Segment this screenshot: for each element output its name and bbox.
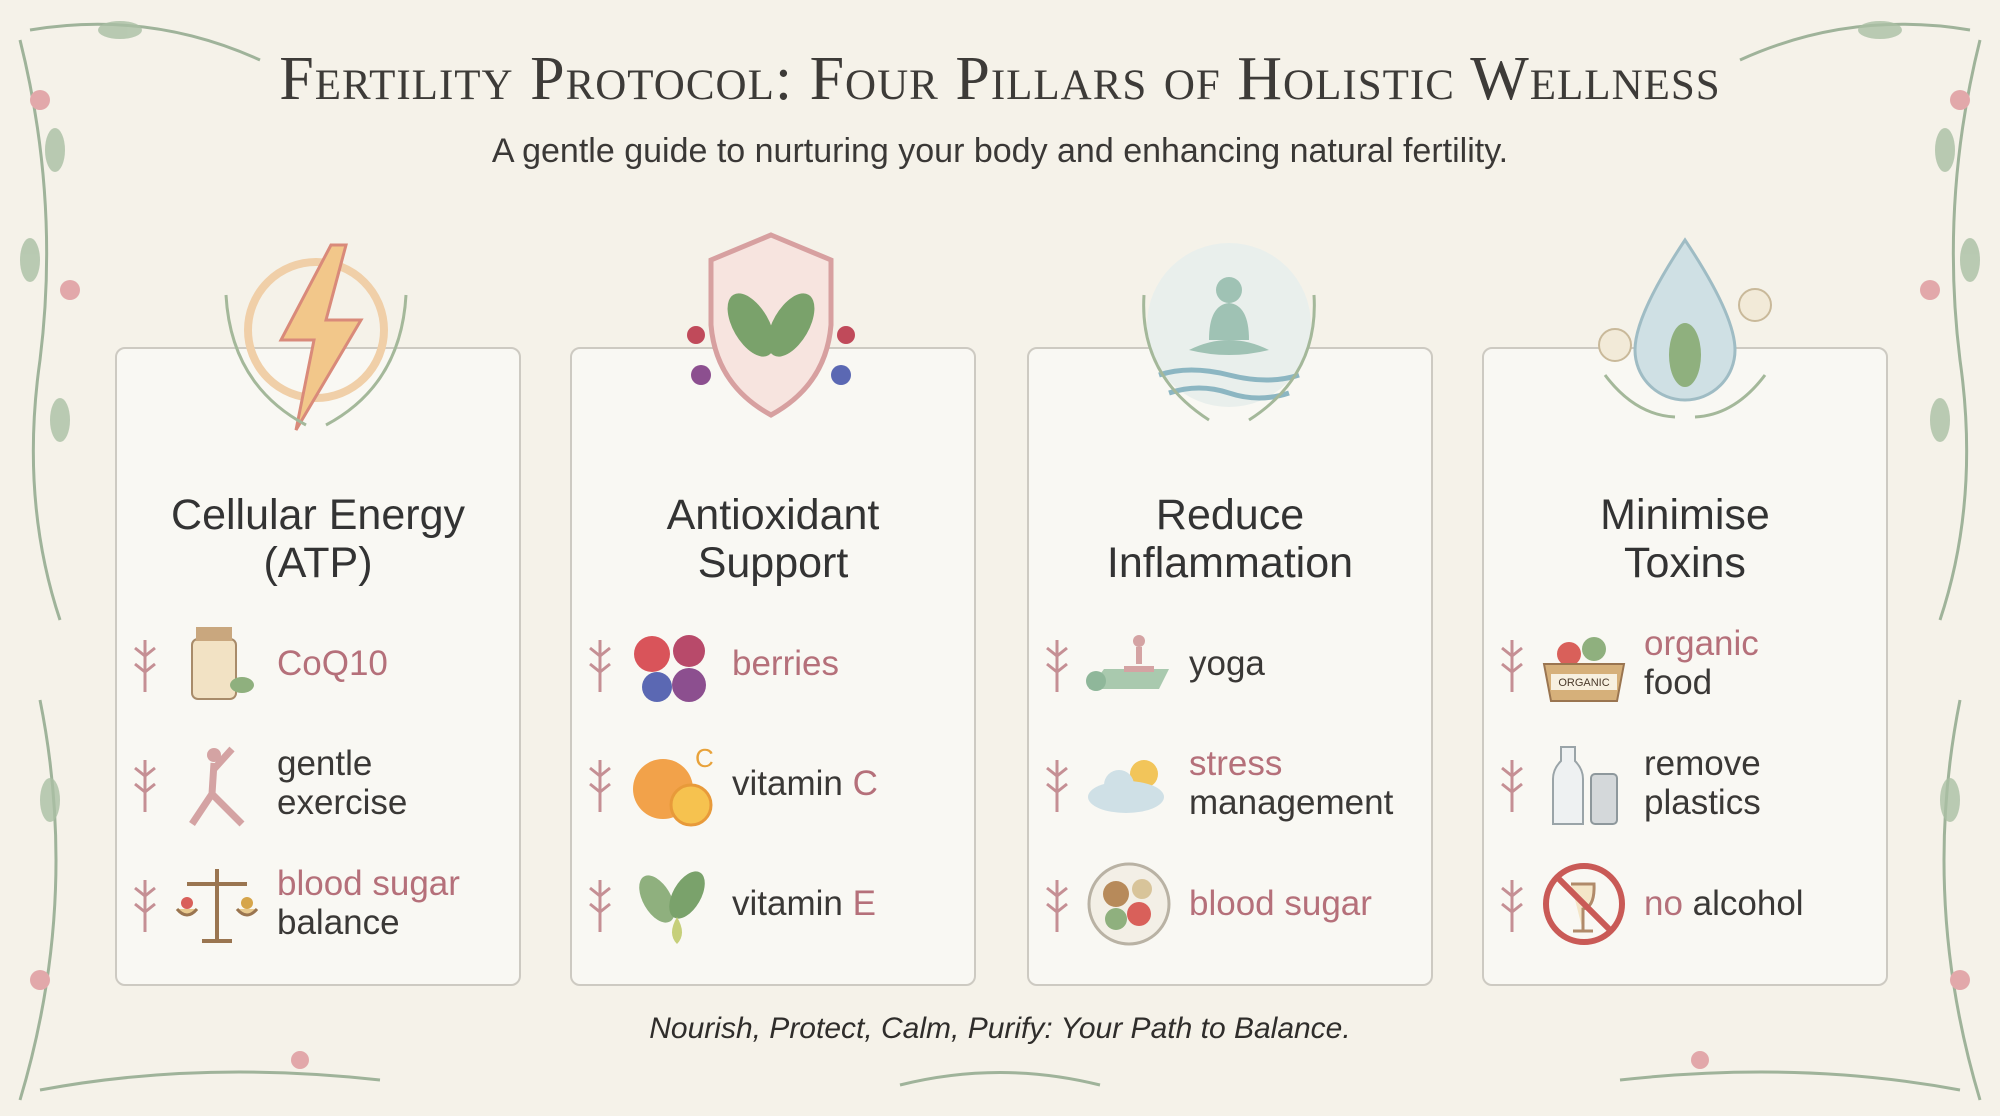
- item: organic food: ORGANIC: [1558, 677, 1610, 689]
- item: blood sugar balance: balance: [277, 903, 400, 942]
- title: Fertility Protocol: Four Pillars of Holistic Wellness: [279, 45, 1721, 113]
- footer tagline: Nourish, Protect, Calm, Purify: Your Path to Balance.: [649, 1012, 1351, 1045]
- panel: reduce inflammation: [1027, 347, 1433, 986]
- item: vitamin E: vitamin E: [732, 884, 876, 923]
- item: remove plastics: [1501, 744, 1761, 825]
- heading: Toxins: [1624, 539, 1746, 587]
- item: no alcohol: [1501, 863, 1804, 945]
- subtitle: A gentle guide to nurturing your body and enhancing natural fertility.: [492, 132, 1508, 170]
- item: blood sugar balance: [134, 864, 460, 943]
- item: yoga: [1046, 635, 1265, 692]
- heading: [666, 491, 879, 587]
- panel: cellular energy: [115, 347, 521, 986]
- item: yoga: yoga: [1189, 644, 1265, 683]
- item: stress management: [1046, 744, 1394, 822]
- item: gentle exercise: [134, 744, 407, 826]
- panel: antioxidant support: [570, 347, 976, 986]
- item: gentle exercise: exercise: [277, 783, 407, 822]
- panel: minimise toxins: [1482, 347, 1888, 986]
- heading: Minimise: [1600, 491, 1770, 539]
- item: organic food: [1501, 624, 1759, 702]
- item: organic food: food: [1644, 663, 1712, 702]
- heading: [1600, 491, 1770, 587]
- item: berries: berries: [732, 644, 839, 683]
- heading: Cellular Energy: [171, 491, 465, 539]
- icon: lightning: [224, 244, 408, 431]
- heading: Reduce: [1156, 491, 1304, 539]
- item: stress management: stress: [1189, 744, 1282, 783]
- heading: Support: [698, 539, 848, 587]
- item: remove plastics: remove: [1644, 744, 1761, 783]
- icon: water drop: [1598, 238, 1772, 418]
- item: gentle exercise: gentle: [277, 744, 372, 783]
- heading: [171, 491, 465, 587]
- item: vitamin C: C: [695, 743, 714, 773]
- item: no alcohol: no alcohol: [1644, 884, 1804, 923]
- heading: Inflammation: [1107, 539, 1353, 587]
- item: vitamin E: [589, 871, 876, 944]
- item: stress management: management: [1189, 783, 1393, 822]
- heading: Antioxidant: [667, 491, 879, 539]
- item: berries: [589, 635, 839, 702]
- item: blood sugar balance: blood sugar: [277, 864, 460, 903]
- item: remove plastics: plastics: [1644, 783, 1761, 822]
- item: blood sugar: blood sugar: [1189, 884, 1372, 923]
- icon: shield: [687, 232, 855, 418]
- item: vitamin C: [589, 743, 878, 826]
- heading: [1107, 491, 1353, 587]
- heading: (ATP): [263, 539, 373, 587]
- item: CoQ10: [134, 627, 388, 700]
- icon: meditation: [1142, 243, 1316, 422]
- item: organic food: organic: [1644, 624, 1759, 663]
- item: CoQ10: CoQ10: [277, 644, 388, 683]
- item: vitamin C: vitamin C: [732, 764, 878, 803]
- item: blood sugar: [1046, 862, 1372, 946]
